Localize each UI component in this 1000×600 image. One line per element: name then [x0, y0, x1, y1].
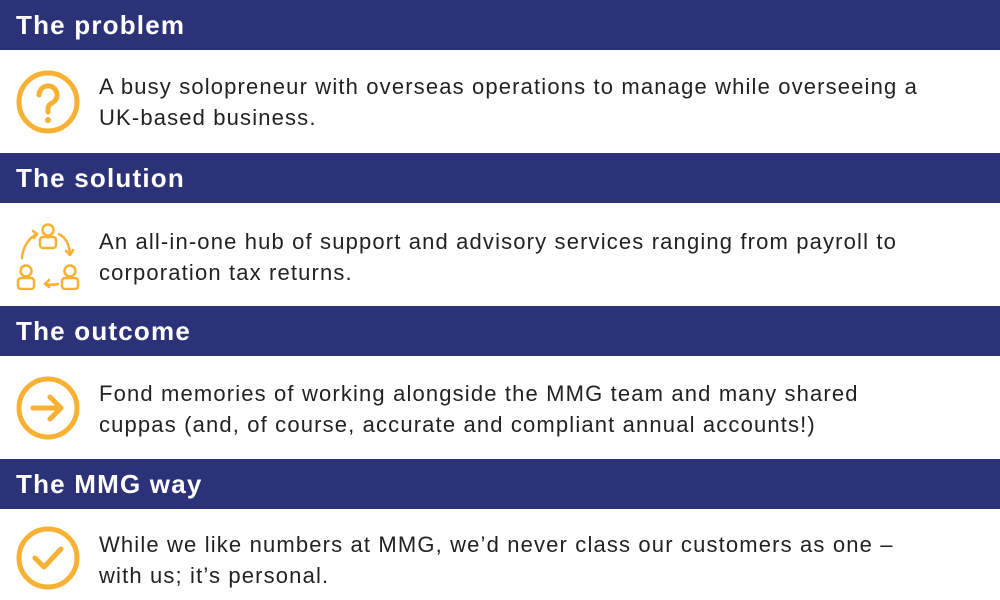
text: solution: An all-in-one hub of support and advisory services ranging from payroll to — [99, 229, 897, 254]
heading: the outcome — [0, 306, 1000, 356]
icon: people cycle — [16, 223, 80, 290]
text: problem: A busy solopreneur with overseas operations to manage while overseeing a — [99, 74, 918, 99]
icon: arrow — [16, 376, 80, 440]
heading: the MMG way — [0, 459, 1000, 509]
text: outcome: Fond memories of working alongside the MMG team and many shared — [99, 381, 859, 406]
text: MMG way: While we like numbers at MMG, we’d never class our customers as one – — [99, 532, 894, 557]
text: solution — [99, 229, 897, 285]
text: problem: UK-based business. — [99, 105, 317, 130]
heading: the solution: The solution — [16, 163, 185, 193]
text: outcome: cuppas (and, of course, accurate and compliant annual accounts!) — [99, 412, 816, 437]
text: MMG way — [99, 532, 894, 588]
text: problem — [99, 74, 918, 130]
icon: question — [16, 70, 80, 134]
heading: the MMG way: The MMG way — [16, 469, 203, 499]
heading: the outcome: The outcome — [16, 316, 191, 346]
text: MMG way: with us; it’s personal. — [99, 563, 329, 588]
heading: the solution — [0, 153, 1000, 203]
text: outcome — [99, 381, 859, 437]
heading: the problem — [0, 0, 1000, 50]
text: solution: corporation tax returns. — [99, 260, 353, 285]
icon: check — [16, 526, 80, 590]
heading: the problem: The problem — [16, 10, 185, 40]
